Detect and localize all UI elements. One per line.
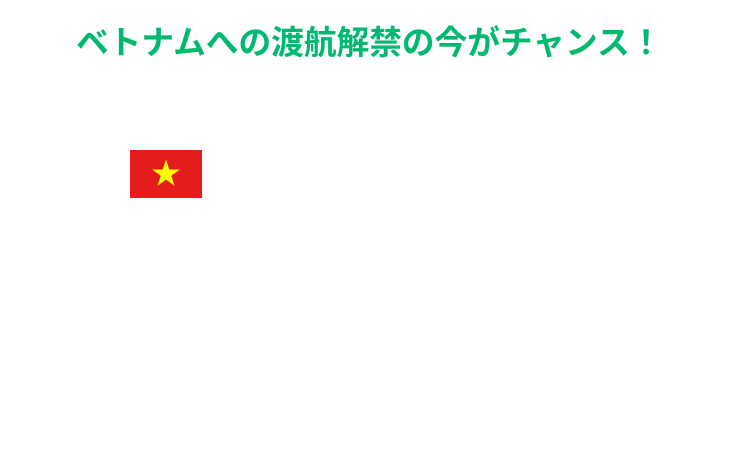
icon: Vietnam flag xyxy=(130,150,202,198)
title: ベトナムへの渡航解禁の今がチャンス！ xyxy=(76,24,662,61)
